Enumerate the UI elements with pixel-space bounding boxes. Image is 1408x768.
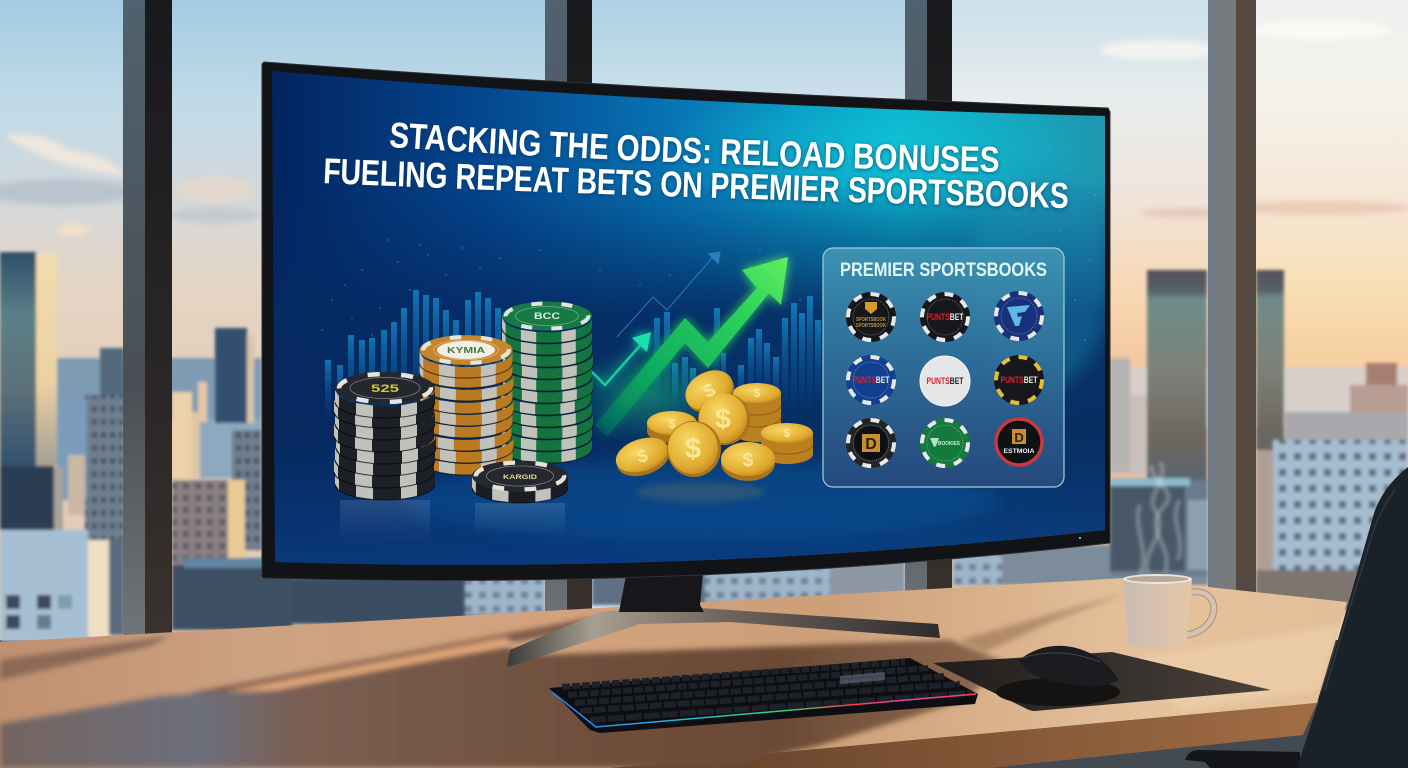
reflections under chips: [340, 480, 765, 530]
coin front right: [721, 442, 775, 481]
chip 5: white puntsbet: PUNTSBET: [926, 376, 964, 386]
coin stack right: [761, 423, 813, 464]
panel heading: PREMIER SPORTSBOOKS: [840, 260, 1047, 281]
teal thin arrow: [592, 332, 651, 385]
window sky centre: [580, 0, 920, 640]
title line 1: STACKING THE ODDS: RELOAD BONUSES: [390, 122, 1001, 176]
coin flat left: [647, 411, 697, 443]
coin stack back: $: [754, 386, 761, 400]
coin front: [667, 421, 721, 477]
coin tilted left: [611, 431, 674, 482]
chip 1: gold shield: [846, 292, 896, 342]
chip 6: yellow puntsbet: PUNTSBET: [1000, 375, 1038, 385]
particle dots: [322, 120, 1095, 340]
steam: [1138, 462, 1180, 575]
title: [324, 122, 1070, 211]
big green arrow shape: [595, 257, 788, 437]
city skyline: [0, 252, 1408, 642]
green growth arrow glow: [580, 352, 708, 438]
window sky right pane: [920, 0, 1220, 640]
skyline right of monitor: [1110, 270, 1208, 576]
skyline centre pane: [592, 545, 1208, 605]
title line 2: FUELING REPEAT BETS ON PREMIER SPORTSBOOKS: [324, 158, 1070, 211]
faint thin arrow: [617, 252, 720, 337]
coin front right: $: [743, 450, 754, 471]
green chip label: BCC: [534, 311, 561, 321]
chip stack: green: [501, 302, 593, 463]
coin stack back: [733, 383, 781, 442]
right side glow: [977, 210, 1105, 389]
rgb lighting strip: [552, 692, 976, 727]
chip 4: blue puntsbet: [846, 355, 896, 405]
skyline second pane: [172, 328, 545, 630]
chip 9: red ring: [996, 419, 1042, 465]
gold chip centre label: [437, 341, 495, 359]
panel: premier sportsbooks: [823, 248, 1064, 487]
desk light and shadow streaks: [0, 592, 1340, 768]
coin tilted left: $: [634, 445, 650, 467]
chip 9: red ring: D: [1014, 430, 1024, 445]
chip stack: gold: [418, 335, 514, 475]
window frames: [123, 0, 1256, 640]
chip 5: white puntsbet: [920, 356, 970, 406]
chip 4: blue puntsbet: PUNTSBET: [852, 375, 890, 385]
chip 3: blue F: [994, 291, 1044, 341]
gold coins pile: [611, 362, 813, 482]
monitor bezel: [262, 62, 1110, 580]
chip 6: yellow puntsbet: [994, 355, 1044, 405]
chip 9: red ring: ESTMOIA: [1003, 448, 1035, 455]
floor reflection band: [400, 460, 1000, 540]
chip 2: black puntsbet: PUNTSBET: [926, 312, 964, 322]
left bar chart: [325, 290, 501, 420]
coin front: $: [685, 433, 701, 465]
loose chip label: KARGID: [503, 474, 537, 481]
coin tilted top: [678, 362, 741, 420]
monitor screen: [272, 70, 1110, 575]
keyboard: [549, 658, 978, 733]
desk: [0, 578, 1347, 768]
chair: [1185, 467, 1408, 768]
key rows: [562, 662, 972, 720]
chip 1: gold shield: SPORTSBOOK: [856, 317, 886, 323]
coin centre: $: [715, 403, 731, 434]
rgb key glow: [840, 676, 885, 680]
skyline left pane: [0, 252, 124, 642]
coffee mug: [1123, 574, 1214, 650]
black chip label: 525: [371, 383, 399, 395]
coin flat left: $: [668, 416, 676, 431]
window sky left: [0, 0, 580, 640]
mouse pad: [933, 652, 1271, 711]
mouse: [1019, 646, 1119, 686]
skyline far right pane: [1256, 270, 1408, 610]
gold chip label text: KYMIA: [447, 346, 485, 355]
chip 8: green: BOOKIES: [938, 441, 960, 447]
chip 8: green: [920, 418, 970, 468]
right bar chart: [654, 296, 821, 401]
coin stack right: $: [784, 426, 791, 440]
chip 7: black gold logo: D: [865, 436, 877, 453]
chip 2: black puntsbet: [920, 292, 970, 342]
mouse shadow: [996, 678, 1120, 706]
floor below desk: [950, 700, 1408, 768]
loose chip: [472, 461, 568, 503]
coin centre: [698, 393, 750, 445]
window sky far right pane: [1220, 0, 1408, 640]
coin tilted top: $: [700, 379, 720, 403]
power LED: [1079, 537, 1081, 539]
clouds: [0, 20, 1408, 236]
chip 1: gold shield: SPORTSBOOK: [856, 323, 886, 329]
chip 7: black gold logo: [846, 418, 896, 468]
monitor stand: [507, 552, 940, 667]
chip stack: black: [334, 372, 436, 500]
